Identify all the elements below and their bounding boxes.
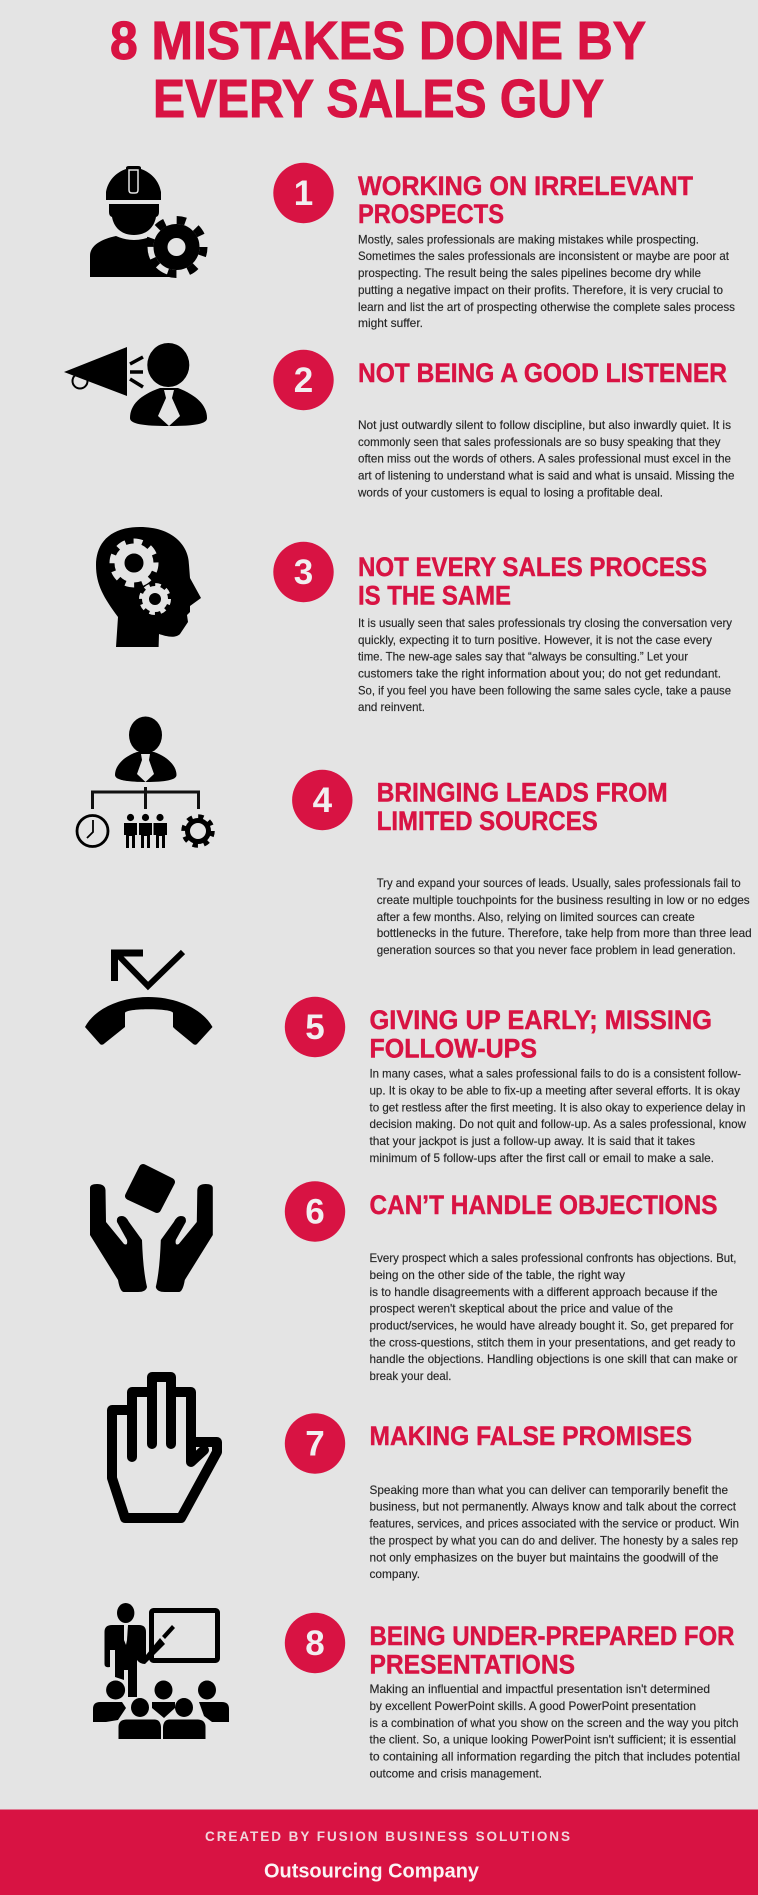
heading 1 [358, 171, 693, 229]
text block 2 [357, 418, 735, 500]
text block 8 [370, 1682, 740, 1780]
heading 6: CAN’T HANDLE OBJECTIONS [370, 1190, 718, 1220]
footer credit: CREATED BY FUSION BUSINESS SOLUTIONS [205, 1829, 570, 1844]
text block 6: product/services, he would have already bought it. So, get prepared for [370, 1318, 734, 1332]
heading 8 [370, 1621, 734, 1680]
panel: mistake 6 [90, 1168, 738, 1383]
text block 1: Sometimes the sales professionals are inconsistent or maybe are poor at [358, 249, 730, 263]
heading 4 [377, 778, 668, 836]
text block 3 [358, 616, 732, 714]
text block 6: handle the objections. Handling objections is one skill that can make or [370, 1352, 738, 1366]
heading 2: NOT BEING A GOOD LISTENER [358, 358, 727, 388]
text block 7: Speaking more than what you can deliver can temporarily benefit the [370, 1483, 728, 1497]
panel: mistake 3 [96, 527, 732, 714]
text block 6: Every prospect which a sales professional confronts has objections. But, [370, 1251, 736, 1265]
text block 6: prospect weren't skeptical about the price and value of the [370, 1302, 673, 1316]
text block 4: after a few months. Also, relying on limited sources can create [377, 910, 695, 924]
text block 7: not only emphasizes on the buyer but maintains the goodwill of the [370, 1550, 719, 1564]
title [110, 11, 646, 129]
heading 8: PRESENTATIONS [370, 1650, 575, 1680]
number badge 4: 4 [313, 781, 333, 820]
text block 3: So, if you feel you have been following the same sales cycle, take a pause [358, 684, 731, 698]
number badge 5 [285, 997, 345, 1057]
text block 1: learn and list the art of prospecting otherwise the complete sales process [358, 300, 735, 314]
text block 4: generation sources so that you never face problem in lead generation. [377, 943, 736, 957]
panel: mistake 1 [90, 163, 735, 330]
panel: mistake 7 [112, 1377, 739, 1581]
text block 5: minimum of 5 follow-ups after the first call or email to make a sale. [370, 1151, 714, 1165]
text block 2: art of listening to understand what is said and what is unsaid. Missing the [358, 468, 735, 482]
text block 2: Not just outwardly silent to follow discipline, but also inwardly quiet. It is [358, 418, 731, 432]
text block 1: Mostly, sales professionals are making mistakes while prospecting. [358, 232, 699, 246]
icon: missed call [85, 952, 212, 1045]
panel: mistake 4 [77, 716, 752, 957]
panel: mistake 2 [64, 343, 735, 500]
heading 4: LIMITED SOURCES [377, 806, 598, 836]
text block 1 [358, 232, 735, 330]
footer company name: Outsourcing Company [264, 1860, 480, 1882]
title: EVERY SALES GUY [153, 69, 604, 129]
text block 2: words of your customers is equal to losing a profitable deal. [357, 486, 663, 500]
text block 1: prospecting. The result being the sales pipelines become dry while [358, 266, 701, 280]
text block 4: create multiple touchpoints for the business resulting in low or no edges [377, 893, 750, 907]
icon: hands holding diamond [90, 1168, 213, 1292]
icon: head with gears [96, 527, 201, 647]
heading 3 [358, 552, 707, 610]
icon: worker with gear [90, 166, 206, 277]
icon: org chart [77, 716, 212, 848]
text block 3: and reinvent. [358, 700, 425, 714]
text block 7: business, but not permanently. Always know and talk about the correct [370, 1500, 737, 1514]
text block 3: customers take the right information about you; do not get redundant. [358, 666, 721, 680]
text block 8: is a combination of what you show on the screen and the way you pitch [370, 1716, 738, 1730]
title: 8 MISTAKES DONE BY [110, 11, 646, 71]
number badge 1 [273, 163, 334, 223]
text block 8: the client. So, a unique looking PowerPoint isn't sufficient; it is essential [370, 1732, 736, 1746]
text block 4 [377, 876, 752, 957]
number badge 8: 8 [305, 1624, 325, 1663]
number badge 1: 1 [294, 174, 313, 213]
text block 2: commonly seen that sales professionals are so busy speaking that they [358, 435, 720, 449]
heading 1: WORKING ON IRRELEVANT [358, 171, 693, 201]
text block 3: quickly, expecting it to turn positive. However, it is not the case every [358, 633, 712, 647]
text block 6: break your deal. [370, 1369, 452, 1383]
heading 5 [370, 1005, 712, 1064]
text block 3: It is usually seen that sales professionals try closing the conversation very [358, 616, 732, 630]
icon: raised hand outline [112, 1377, 217, 1518]
heading 3: IS THE SAME [358, 580, 511, 610]
number badge 4 [292, 770, 352, 830]
heading 5: GIVING UP EARLY; MISSING [370, 1005, 712, 1035]
heading 7: MAKING FALSE PROMISES [370, 1421, 692, 1451]
text block 1: putting a negative impact on their profits. Therefore, it is very crucial to [358, 283, 723, 297]
panel: mistake 8 [93, 1603, 740, 1780]
text block 4: bottlenecks in the future. Therefore, take help from more than three lead [377, 926, 752, 940]
heading 3: NOT EVERY SALES PROCESS [358, 552, 707, 582]
text block 3: time. The new-age sales say that “always be consulting.” Let your [358, 650, 688, 664]
text block 5: up. It is okay to be able to fix-up a meeting after several efforts. It is okay [370, 1084, 740, 1098]
text block 7 [370, 1483, 739, 1581]
number badge 7: 7 [305, 1424, 325, 1464]
text block 6: the cross-questions, stitch them in your presentations, and get ready to [370, 1336, 736, 1350]
text block 7: company. [370, 1567, 420, 1581]
text block 5: In many cases, what a sales professional fails to do is a consistent follow- [370, 1066, 741, 1080]
number badge 2 [273, 350, 334, 410]
number badge 5: 5 [305, 1008, 325, 1047]
text block 5: to get restless after the first meeting. It is also okay to experience delay in [370, 1100, 746, 1114]
text block 2: often miss out the words of others. A sales professional must excel in the [358, 452, 731, 466]
heading 1: PROSPECTS [358, 199, 504, 229]
number badge 7 [285, 1413, 345, 1474]
number badge 8 [285, 1613, 345, 1673]
number badge 3 [273, 542, 334, 602]
text block 8: outcome and crisis management. [370, 1766, 542, 1780]
text block 8: to containing all information regarding the pitch that includes potential [370, 1750, 740, 1764]
number badge 3: 3 [294, 553, 313, 592]
icon: megaphone and person [64, 343, 207, 426]
text block 5: that your jackpot is just a follow-up away. It is said that it takes [370, 1134, 695, 1148]
footer band [0, 1810, 758, 1895]
heading 5: FOLLOW-UPS [370, 1034, 537, 1064]
text block 6 [370, 1251, 738, 1383]
text block 4: Try and expand your sources of leads. Usually, sales professionals fail to [377, 876, 741, 890]
text block 6: being on the other side of the table, the right way [370, 1268, 625, 1282]
heading 4: BRINGING LEADS FROM [377, 778, 668, 808]
text block 5 [370, 1066, 746, 1165]
text block 7: the prospect by what you can do and deliver. The honesty by a sales rep [370, 1534, 738, 1548]
text block 5: decision making. Do not quit and follow-up. As a sales professional, know [370, 1117, 746, 1131]
number badge 6: 6 [305, 1192, 325, 1232]
icon: presenter and audience [93, 1603, 229, 1739]
number badge 2: 2 [294, 361, 313, 400]
panel: mistake 5 [85, 952, 746, 1165]
text block 1: might suffer. [358, 316, 423, 330]
text block 8: Making an influential and impactful presentation isn't determined [370, 1682, 710, 1696]
text block 6: is to handle disagreements with a different approach because if the [370, 1285, 718, 1299]
text block 8: by excellent PowerPoint skills. A good PowerPoint presentation [370, 1699, 696, 1713]
number badge 6 [285, 1181, 345, 1242]
text block 7: features, services, and prices associated with the service or product. Win [370, 1516, 739, 1530]
